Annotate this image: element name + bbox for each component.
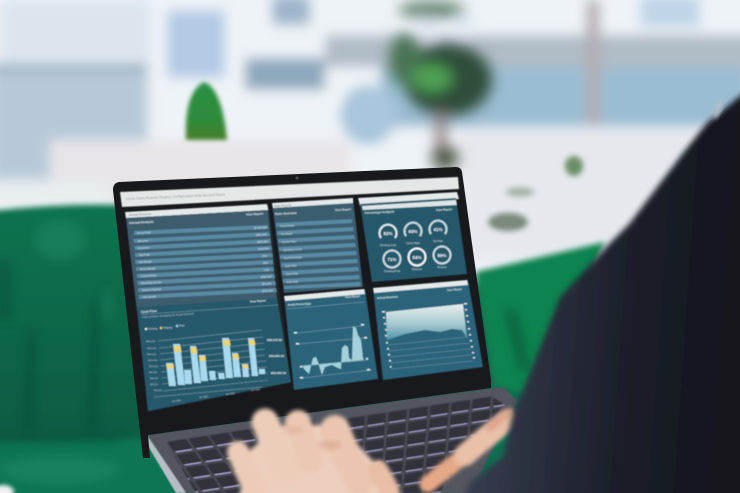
panel: annual report table: Revenue [138,238,149,243]
panel: ratio table: Cash Ratio [285,264,298,268]
panel: cash flow bar chart [137,298,291,411]
panel: actual revenue area chart: Actual Revenue [377,295,398,300]
panel: percentage analysis rings: Net Profit [433,240,443,243]
panel: cash flow bar chart: View Report [250,298,266,303]
panel: annual report table: $845,000 [256,232,267,237]
ring 54%: 54% [412,255,422,260]
panel: ratio table: View Report [335,207,351,212]
panel: percentage analysis rings: Expenses [412,269,423,271]
gridlines [154,330,268,397]
panel: annual report table: 28% [262,254,268,258]
dashboard screen [120,177,483,412]
ring 89%: 89% [437,253,447,258]
legend: Profit [179,324,185,328]
axis labels: $140,000 [147,354,157,356]
panel: cash flow bar chart: Cash Flow [141,309,157,314]
panel: annual report table: $41,000 [262,281,272,286]
keyboard keys, left of hand [166,418,320,493]
screen lid [113,167,491,458]
panel: percentage analysis rings: Operating Profit [384,270,400,273]
panel: cash flow bar chart: Cash coming in and going out of your business [142,312,195,319]
panel: annual report table: Net Profit [139,252,150,257]
axis labels: Jan 2020 [226,393,236,396]
axis labels: $20,000 [154,390,163,392]
panel: ratio table: Ratio Reports [274,203,292,208]
panel: percentage analysis rings: View Report [436,207,452,212]
person's shoulder and dark jacket [462,88,740,493]
panel: ratio table: Operating Income [283,248,303,252]
green sofa [0,205,605,493]
panel: ratio table: Gross Margin [280,224,295,228]
panel: percentage analysis rings: Operating Costs [380,244,397,247]
keyboard keys, right of hand [345,396,505,493]
panel: ratio table: Net Margin [281,232,293,236]
panel: annual report table: 1.96 [264,268,270,272]
ear highlight [711,101,725,119]
keyboard deck [145,387,518,493]
ring 69%: 69% [408,229,418,234]
panel: annual report table: Gross Profit [137,230,151,235]
panel: annual report table: Gross Margin [140,266,156,271]
browser toolbar: Home Sales Reports Finance Configuration Help Account About [126,193,225,201]
bar caps [166,340,256,368]
axis labels: Jan 2020 [251,389,261,392]
panel: profit percentage chart [284,289,378,390]
browser toolbar [120,177,459,207]
panel: annual report table: View Report [246,212,263,216]
side totals: $99,000.00 [271,371,286,375]
legend: Outgoing [163,326,173,330]
white object in bottom corner [0,485,14,493]
panel: annual report table: Annual Analysis [129,220,154,225]
axis labels: $180,000 [146,341,156,343]
panel: annual report table: Net Income [143,294,157,299]
panel: actual revenue area chart [373,280,483,380]
blurred plant: tree [389,2,492,170]
panel: profit percentage chart: Profit Percentage [288,301,312,307]
panel: annual report table [125,204,291,412]
panel: percentage analysis rings [358,192,467,282]
side totals [267,338,286,375]
axis labels: $120,000 [148,360,158,362]
left hand on keyboard [428,412,510,484]
panel: annual report table: Current Ratio [141,273,157,278]
bars [166,338,265,386]
panel: ratio table: Quick Ratio [286,272,299,276]
legend: Incoming [148,328,158,330]
axis labels: Jan 2020 [199,396,209,399]
axis labels: $100,000 [149,366,159,368]
laptop [113,167,518,493]
axis labels: $60,000 [150,378,159,380]
panel: annual report table: Interest Expense [142,287,162,292]
ring 82%: 82% [383,231,393,236]
camera [296,176,298,180]
panel: percentage analysis rings: Revenue [437,267,447,269]
panel: annual report table: Expenses [138,245,150,250]
panel: annual report table: Annual Revenue [129,212,152,217]
blurred plant: small topiary [186,82,227,140]
right hand on keyboard [238,422,400,493]
panel: annual report table: $390,000 [261,274,272,279]
panel: annual report table: $255,000 [258,246,269,251]
legend [145,324,185,330]
panel: annual report table: Operating Income [141,280,162,285]
panel: ratio table: Net Profit Margin [284,256,303,260]
panel: ratio table [272,198,363,293]
panel: ratio table: Ratio Overview [275,211,297,216]
panel: annual report table: $255,000 [262,288,273,293]
side totals: $49,000.00 [269,354,284,358]
blurred branches [488,156,583,231]
ring 71%: 71% [387,257,397,262]
panel: annual report table: 44% [263,261,269,265]
panel: ratio table: Debt Ratio [287,280,299,284]
blurred background: windows and buildings [0,0,740,280]
axis labels [146,341,261,403]
side totals: $98,247.82 [267,338,282,342]
axis labels: Jan 2020 [172,400,182,403]
axis labels: $80,000 [149,372,158,374]
axis labels: $40,000 [150,384,159,386]
panel: ratio table: Current Ratio [282,240,297,244]
panel: profit percentage chart: View Report [345,294,360,299]
axis labels: $160,000 [147,348,157,350]
ring 41%: 41% [433,227,443,232]
panel: annual report table: $660,000 [257,239,268,244]
panel: percentage analysis rings: Current Ratio [406,242,421,245]
panel: actual revenue area chart: View Report [447,287,462,292]
panel: percentage analysis rings: Percentage Analysis [365,209,395,215]
panel: annual report table: $1,932,000 [254,225,268,230]
panel: annual report table: Net Margin [139,259,152,264]
